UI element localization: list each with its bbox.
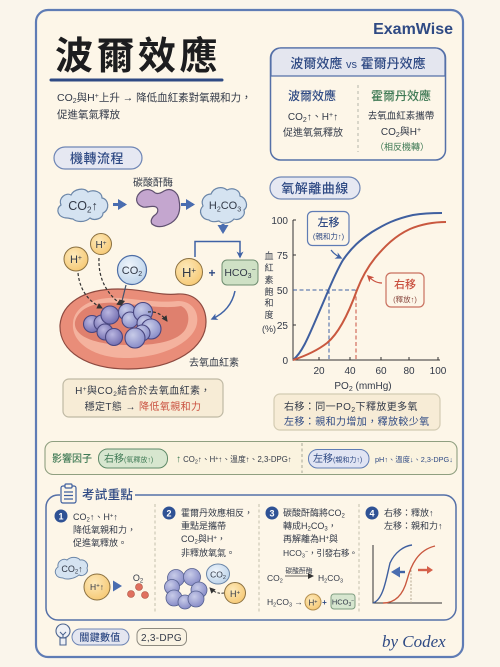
curve: right shift — [293, 222, 446, 360]
badge: small H+ 2: H — [95, 240, 103, 251]
icon: CO2 cloud small: ↑ — [78, 564, 83, 574]
signature: by Codex: by Codex — [382, 632, 446, 651]
icon: O2 molecules — [128, 573, 148, 598]
x axis ticks — [313, 366, 447, 377]
point 3: CO — [311, 521, 324, 531]
subtitle text: 促進氧氣釋放 — [57, 108, 120, 121]
callout: right shift — [386, 273, 424, 307]
icon: O2 molecules: O — [133, 573, 140, 583]
badge: HCO3-: − — [252, 267, 256, 274]
equation: H2CO3 dissociation — [267, 594, 355, 610]
flow: CO2 cloud: CO — [68, 199, 87, 213]
x axis ticks: 20 — [313, 366, 325, 377]
flow: CO2 cloud — [58, 189, 108, 222]
equation: H2CO3 dissociation: → — [292, 597, 303, 607]
panel: comparison — [270, 48, 446, 160]
equation: H2CO3 dissociation: HCO — [332, 598, 348, 606]
point 3: − — [305, 550, 308, 556]
equation: H2CO3 dissociation: H — [267, 597, 273, 607]
point 2: ， — [217, 534, 226, 544]
point 3: 與 — [329, 534, 338, 544]
callout: binding note: 穩定T態 → 降低氧親和力 — [85, 400, 201, 413]
y axis title: 紅 — [264, 263, 274, 273]
callout: binding note: 結合於去氧血紅素， — [117, 384, 211, 397]
arrow: H+ to ring — [210, 588, 224, 593]
brand: ExamWise: ExamWise — [373, 21, 453, 38]
point 1: 促進氧釋放。 — [73, 537, 127, 548]
subtitle text: 2 — [73, 98, 77, 105]
flow: CO2 cloud: ↑ — [91, 199, 98, 213]
column: Bohr effect: ↑、H — [307, 112, 329, 123]
arrow: right shift pointer — [368, 276, 382, 283]
pill: left shift — [308, 450, 369, 468]
callout: left shift — [308, 212, 349, 246]
heading: dissociation curve — [270, 177, 360, 199]
badge: small H+ 1 — [64, 247, 88, 271]
x axis title: PO — [334, 381, 349, 392]
icon: O2 molecules: 2 — [140, 578, 144, 584]
point 3 — [266, 506, 357, 610]
icon: CO2 cloud small: CO — [61, 564, 75, 574]
equation: H2CO3 dissociation: − — [351, 598, 354, 604]
number badge 3: 3 — [269, 508, 275, 518]
y axis title: (%) — [262, 324, 276, 334]
right shift factors: ↑、溫度↑、2,3-DPG↑ — [218, 454, 292, 464]
label: deoxyhemoglobin: 去氧血紅素 — [189, 356, 239, 369]
icon: enzyme — [137, 190, 180, 227]
y axis title: 和 — [264, 298, 274, 308]
badge: H+ up — [84, 574, 110, 600]
x axis ticks: 100 — [430, 366, 447, 377]
y axis title: 飽 — [264, 286, 274, 297]
callout: binding note — [63, 379, 223, 417]
illustration: red blood cell — [60, 289, 206, 369]
x axis ticks: 40 — [344, 366, 356, 377]
callout: curve summary — [274, 394, 440, 430]
badge: CO2 circle: CO — [122, 265, 138, 277]
callout: curve summary: 2 — [351, 407, 356, 414]
point 3: 2 — [308, 526, 312, 532]
arrows: dashed into cell — [78, 258, 167, 321]
badge: small H+ 1: H — [70, 254, 78, 266]
column: Haldane effect: 去氧血紅素攜帶 — [368, 110, 434, 122]
subtitle text: CO — [57, 92, 73, 104]
point 1: CO — [73, 512, 86, 522]
callout: right shift: 右移 — [394, 277, 416, 291]
comparison header: 波爾效應 vs 霍爾丹效應 — [290, 56, 426, 71]
point 2: 與H — [198, 534, 213, 544]
badge: small H+ 2 — [90, 234, 112, 254]
point 2: 非釋放氧氣。 — [181, 547, 235, 558]
column: Bohr effect: CO — [288, 112, 303, 123]
badge: small H+ 1: + — [78, 255, 82, 262]
icon: clipboard — [61, 484, 76, 503]
badge: HCO3- — [222, 260, 258, 285]
equation: CO2 to H2CO3: CO — [327, 573, 340, 583]
chart: oxygen dissociation curve — [262, 212, 447, 393]
callout: binding note: H — [75, 386, 83, 397]
y axis title — [262, 250, 276, 334]
badge: H+ large — [176, 258, 202, 286]
point 1: ↑、H — [90, 512, 110, 522]
callout: binding note: + — [83, 386, 87, 393]
flow: H2CO3 cloud — [201, 188, 247, 223]
flow: H2CO3 cloud: H — [209, 200, 217, 212]
arrow: left shift pointer — [331, 250, 341, 258]
arrow: to O2 — [113, 585, 120, 587]
point 2: + — [213, 536, 217, 542]
flow: CO2 cloud: 2 — [87, 206, 92, 214]
callout: curve summary: 左移：親和力增加，釋放較少氧 — [284, 415, 430, 428]
x axis ticks: 80 — [403, 366, 415, 377]
column: Haldane effect — [368, 88, 434, 152]
arrow: enzyme to H2CO3 — [181, 203, 193, 206]
pill: right shift — [98, 449, 168, 468]
subtitle text: 與H — [77, 92, 95, 104]
plus sign: + — [208, 266, 216, 280]
left shift factors: pH↑、溫度↓、2,3-DPG↓ — [375, 455, 453, 464]
point 2: CO — [181, 534, 194, 544]
equation: H2CO3 dissociation: H — [308, 598, 314, 608]
badge: CO2 small: CO — [210, 570, 223, 580]
y axis ticks: 100 — [271, 216, 288, 227]
equation: CO2 to H2CO3 — [267, 566, 343, 584]
right shift factors: ↑ CO — [176, 454, 195, 465]
column: Bohr effect: 波爾效應 — [288, 88, 336, 103]
y axis ticks: 0 — [282, 356, 288, 367]
number badge 4: 4 — [369, 508, 375, 518]
point 3: 3 — [324, 526, 328, 532]
pill: key values: 關鍵數值 — [79, 631, 121, 644]
heading: mechanism: 機轉流程 — [70, 151, 124, 166]
equation: CO2 to H2CO3: 3 — [340, 578, 343, 584]
title: 波爾效應 — [55, 36, 221, 78]
callout: binding note: 2 — [113, 391, 117, 398]
icon: CO2 cloud small: 2 — [75, 570, 79, 576]
point 3: 碳酸酐酶將CO — [283, 508, 342, 518]
y axis ticks: 25 — [277, 321, 288, 332]
badge: HCO3-: 3 — [248, 273, 252, 280]
heading: mechanism — [54, 147, 142, 169]
arrow: to red cell — [212, 291, 235, 319]
equation: CO2 to H2CO3: 2 — [280, 578, 283, 584]
equation: CO2 to H2CO3: 碳酸酐酶 — [285, 566, 313, 575]
number badge 2: 2 — [166, 508, 172, 518]
badge: CO2 small: 2 — [223, 575, 226, 581]
y axis ticks — [271, 216, 288, 367]
badge: H+ large: + — [191, 266, 196, 275]
point 4: 右移：釋放↑ — [384, 507, 434, 518]
point 1: 降低氧親和力， — [73, 524, 136, 535]
column: Bohr effect: ↑ — [333, 112, 338, 123]
point 1: ↑ — [113, 512, 118, 522]
column: Bohr effect: + — [329, 112, 333, 119]
badge: H+ large: H — [182, 265, 191, 280]
icon: CO2 cloud small — [55, 557, 88, 579]
equation: H2CO3 dissociation: + — [322, 598, 327, 607]
badge: H+ small: H — [230, 589, 236, 599]
icon: hemoglobin ring — [164, 568, 207, 609]
arrow: CO2 to enzyme — [113, 203, 125, 206]
badge: H+ small: + — [236, 590, 240, 596]
equation: CO2 to H2CO3: CO — [267, 573, 280, 583]
point 1: 2 — [86, 518, 90, 524]
point 3: 再解離為H — [283, 534, 326, 544]
number badge 1: 1 — [58, 512, 64, 522]
column: Haldane effect: CO — [381, 127, 396, 138]
column: Bohr effect — [283, 88, 343, 139]
callout: left shift: (親和力↑) — [313, 231, 345, 241]
flow: H2CO3 cloud: 3 — [237, 206, 241, 214]
point 1: + — [110, 514, 114, 520]
x axis ticks: 60 — [375, 366, 387, 377]
pill: left shift: 左移(親和力↑) — [313, 452, 362, 465]
curve: left shift — [293, 213, 442, 360]
point 2: 2 — [194, 540, 198, 546]
icon: light bulb — [56, 624, 70, 645]
y axis title: 血 — [264, 250, 274, 261]
badge: CO2 circle — [118, 256, 146, 284]
point 3: ， — [328, 521, 337, 531]
badge: CO2 small — [206, 564, 230, 584]
pill: 2,3-DPG — [137, 628, 186, 646]
subtitle text: 上升 → 降低血紅素對氧親和力， — [99, 91, 252, 104]
pill: right shift: 右移(氧釋放↑) — [104, 452, 153, 465]
equation: CO2 to H2CO3: H — [318, 573, 324, 583]
subtitle text: + — [95, 93, 99, 100]
point 3: 3 — [302, 554, 305, 560]
panel: influencing factors — [45, 442, 457, 474]
callout: curve summary: 右移：同一PO — [284, 402, 351, 413]
equation: H2CO3 dissociation: CO — [276, 597, 289, 607]
badge: CO2 circle: 2 — [138, 271, 142, 278]
column: Haldane effect: 霍爾丹效應 — [371, 88, 431, 103]
point 3: HCO — [283, 548, 302, 558]
badge: H+ small — [224, 582, 246, 604]
badge: H+ up: ↑ — [100, 582, 104, 592]
x axis title: 2 — [349, 386, 353, 393]
chart: mini curves — [373, 545, 442, 603]
badge: H+ up: + — [96, 584, 100, 590]
comparison header — [271, 48, 445, 76]
callout: right shift: (釋放↑) — [393, 294, 417, 304]
callout: binding note: 與CO — [87, 385, 113, 397]
equation: CO2 to H2CO3: 2 — [324, 578, 327, 584]
point 2: 重點是攜帶 — [181, 520, 226, 531]
callout: curve summary: 下釋放更多氧 — [356, 400, 418, 413]
point 2: 霍爾丹效應相反， — [181, 507, 253, 518]
point 2 — [162, 506, 253, 609]
arrow: H2CO3 splits — [195, 224, 240, 257]
exam heading: 考試重點 — [82, 487, 133, 502]
right shift factors: + — [215, 456, 218, 462]
point 3: 轉成H — [283, 521, 308, 531]
column: Haldane effect: 與H — [400, 126, 417, 138]
flow: H2CO3 cloud: 2 — [217, 206, 221, 214]
point 1 — [54, 510, 148, 600]
equation: H2CO3 dissociation: 3 — [348, 602, 351, 608]
point 3: 2 — [342, 514, 346, 520]
column: Haldane effect: + — [417, 127, 421, 134]
label: carbonic anhydrase: 碳酸酐酶 — [133, 176, 173, 189]
point 4 — [366, 506, 443, 603]
hemoglobin cluster — [84, 302, 161, 348]
y axis title: 素 — [264, 274, 274, 285]
y axis ticks: 75 — [277, 251, 288, 262]
pill: key values — [72, 629, 129, 645]
right shift factors: 2 — [195, 460, 198, 466]
y axis ticks: 50 — [277, 286, 288, 297]
callout: left shift: 左移 — [318, 215, 340, 229]
pill: 2,3-DPG: 2,3-DPG — [141, 633, 182, 644]
equation: H2CO3 dissociation: + — [314, 600, 318, 606]
point 3: + — [326, 536, 330, 542]
heading: dissociation curve: 氧解離曲線 — [281, 181, 349, 196]
point 4: 左移：親和力↑ — [384, 520, 443, 531]
column: Bohr effect: 促進氧氣釋放 — [283, 126, 343, 139]
panel: exam points — [46, 484, 456, 620]
equation: H2CO3 dissociation: 2 — [273, 602, 276, 608]
equation: H2CO3 dissociation: 3 — [289, 602, 292, 608]
y axis title: 度 — [264, 309, 274, 320]
subtitle text — [57, 91, 252, 121]
x axis title: (mmHg) — [353, 381, 392, 392]
badge: H+ up: H — [90, 582, 96, 592]
flow: H2CO3 cloud: CO — [221, 200, 238, 212]
point 3: ，引發右移。 — [308, 548, 357, 558]
column: Haldane effect: （相反機轉） — [375, 141, 429, 152]
factors label: 影響因子 — [52, 452, 92, 465]
column: Haldane effect: 2 — [396, 132, 400, 139]
badge: small H+ 2: + — [103, 240, 107, 247]
right shift factors: ↑、H — [198, 455, 215, 464]
column: Bohr effect: 2 — [303, 117, 307, 124]
badge: HCO3-: HCO — [224, 267, 248, 279]
